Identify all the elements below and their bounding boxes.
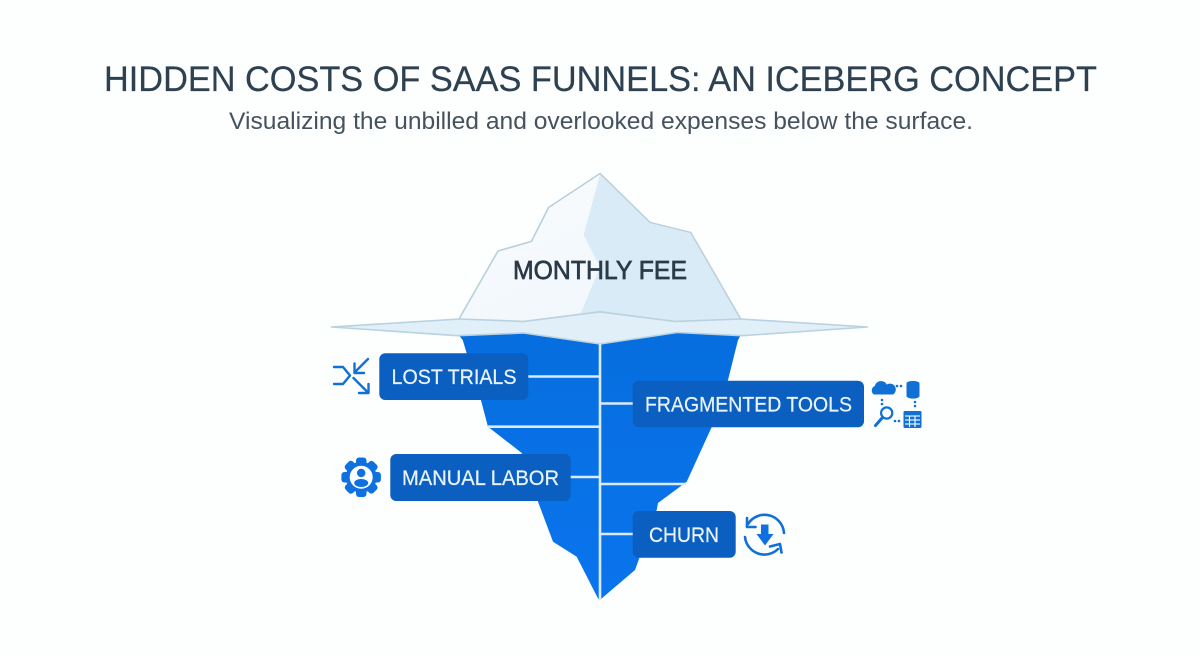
label box: churn: CHURN	[649, 524, 719, 547]
label box: fragmented tools: FRAGMENTED TOOLS	[645, 394, 852, 416]
label box: lost trials	[379, 353, 528, 400]
title: HIDDEN COSTS OF SAAS FUNNELS: AN ICEBERG CONCEPT	[104, 60, 1097, 99]
connector dots	[881, 385, 916, 422]
subtitle: Visualizing the unbilled and overlooked expenses below the surface.	[229, 108, 973, 135]
label box: fragmented tools	[633, 381, 864, 427]
label box: manual labor: MANUAL LABOR	[402, 467, 559, 490]
label box: lost trials: LOST TRIALS	[392, 366, 516, 389]
cloud	[872, 381, 896, 394]
label box: manual labor	[390, 454, 571, 501]
icon: gear with person	[341, 458, 381, 497]
icon: churn cycle with down arrow	[745, 515, 784, 555]
iceberg body under water	[457, 330, 742, 599]
table	[904, 411, 922, 428]
label: monthly fee: MONTHLY FEE	[513, 255, 687, 285]
iceberg tip above water	[459, 174, 741, 325]
icon: crossing arrows	[334, 359, 368, 393]
iceberg	[331, 174, 867, 600]
waterline plate	[331, 312, 867, 344]
database	[906, 381, 920, 399]
icon: connected tools	[872, 381, 922, 428]
magnifier	[876, 407, 892, 426]
label box: churn	[633, 511, 736, 558]
crack lines	[488, 344, 686, 600]
